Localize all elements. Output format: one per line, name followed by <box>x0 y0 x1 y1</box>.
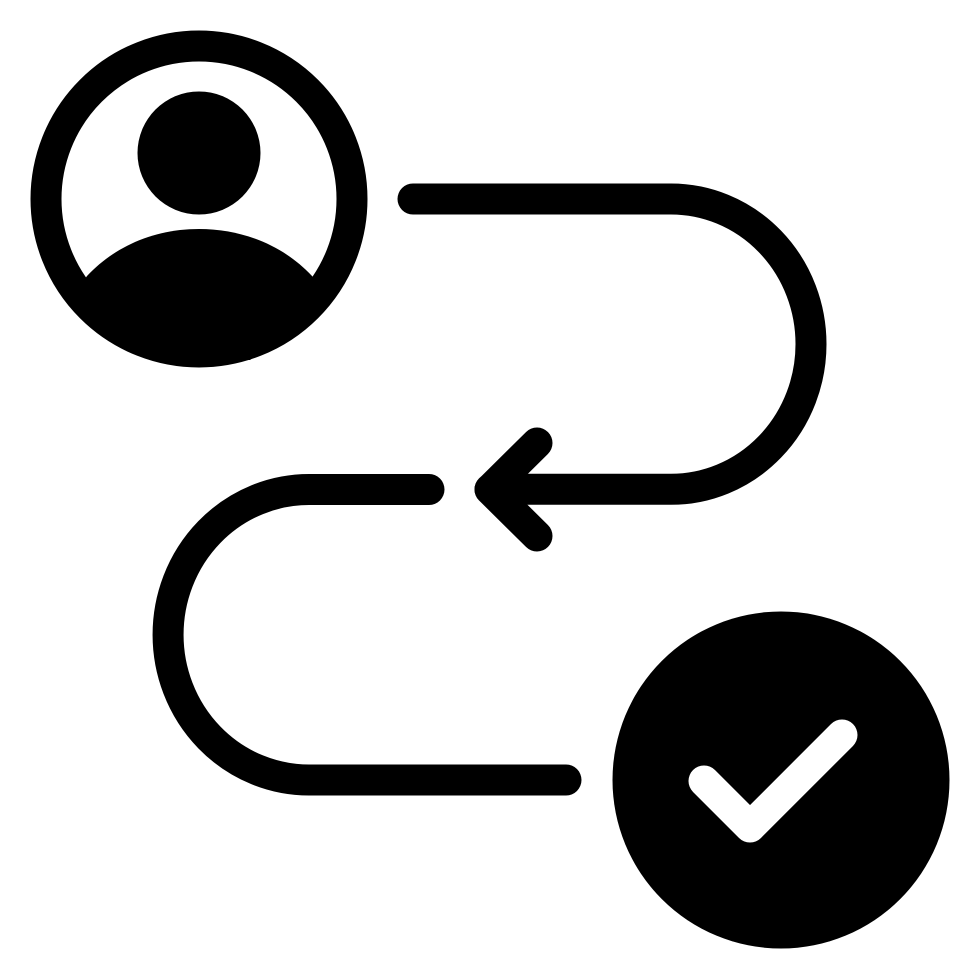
arrow: upper path curving back to the arrowhead <box>413 199 811 536</box>
icon: check mark badge <box>612 612 950 948</box>
connector: lower path leading to the check badge <box>168 490 566 780</box>
icon: user avatar in circle <box>46 46 352 360</box>
